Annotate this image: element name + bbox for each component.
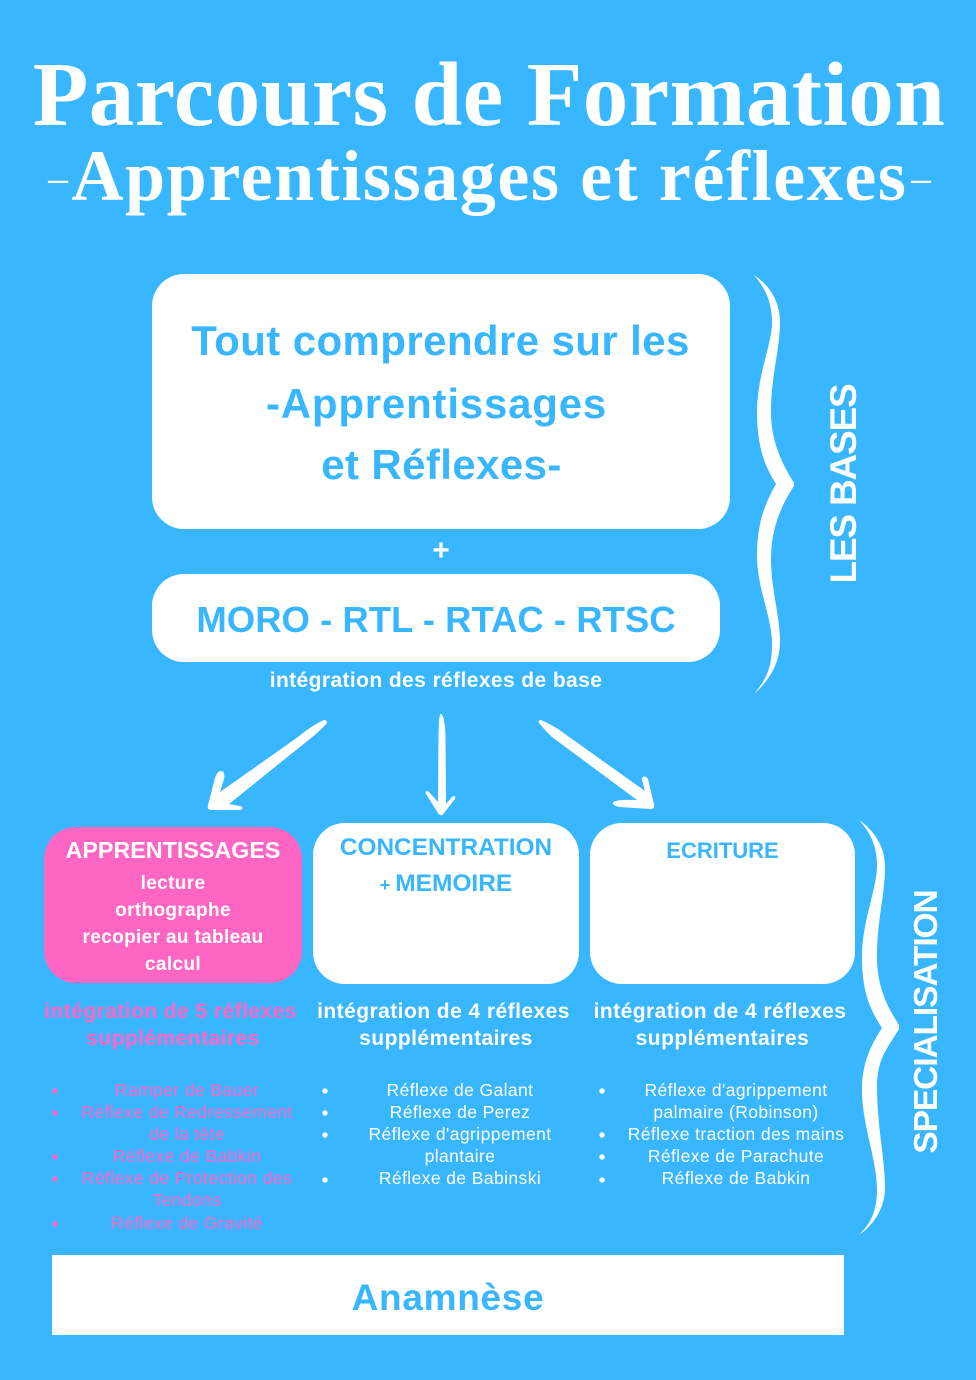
panel: ecriture: ECRITURE bbox=[666, 838, 779, 863]
brace: les bases bbox=[754, 275, 794, 694]
panel: tout comprendre: -Apprentissages bbox=[266, 380, 607, 427]
heading: concentration réflexes: supplémentaires bbox=[359, 1027, 533, 1050]
caption: intégration des réflexes de base: intégration des réflexes de base bbox=[270, 669, 602, 692]
heading: apprentissages réflexes: intégration de 5 réflexes bbox=[44, 1000, 297, 1023]
bullets: list markers bbox=[52, 1088, 605, 1227]
panel: apprentissages: orthographe bbox=[115, 900, 231, 921]
list: concentration: plantaire bbox=[425, 1146, 495, 1166]
title: Parcours de Formation bbox=[33, 44, 945, 145]
heading: concentration réflexes bbox=[317, 1000, 570, 1050]
list: apprentissages: Réflexe de Redressement bbox=[81, 1102, 293, 1122]
label: specialisation: SPECIALISATION bbox=[908, 890, 945, 1154]
heading: concentration réflexes: intégration de 4 réflexes bbox=[317, 1000, 570, 1023]
plus sign: + bbox=[432, 534, 450, 567]
arrow: right bbox=[538, 720, 654, 809]
list: concentration: Réflexe de Perez bbox=[390, 1102, 530, 1122]
list: concentration bbox=[369, 1080, 551, 1188]
heading: apprentissages réflexes: supplémentaires bbox=[86, 1027, 260, 1050]
list: apprentissages: Réflexe de Gravité bbox=[111, 1213, 263, 1233]
heading: ecriture réflexes: intégration de 4 réflexes bbox=[594, 1000, 846, 1023]
heading: ecriture réflexes: supplémentaires bbox=[636, 1027, 809, 1050]
list: ecriture: Réflexe d'agrippement bbox=[645, 1080, 827, 1100]
title: - bbox=[908, 163, 934, 196]
panel: apprentissages: calcul bbox=[145, 954, 201, 975]
arrow: left bbox=[208, 720, 327, 810]
list: apprentissages: Tendons bbox=[153, 1190, 221, 1210]
list: concentration: Réflexe de Babinski bbox=[379, 1168, 541, 1188]
list: ecriture: Réflexe de Parachute bbox=[648, 1146, 824, 1166]
heading: apprentissages réflexes bbox=[44, 1000, 297, 1050]
title: Apprentissages et réflexes bbox=[71, 136, 908, 216]
title: - bbox=[45, 163, 71, 196]
panel: tout comprendre: et Réflexes- bbox=[321, 441, 562, 488]
list: ecriture bbox=[628, 1080, 844, 1188]
panel: anamnèse: Anamnèse bbox=[352, 1277, 544, 1318]
panel: apprentissages: APPRENTISSAGES bbox=[66, 837, 280, 863]
panel: apprentissages: recopier au tableau bbox=[83, 927, 263, 948]
list: apprentissages: Ramper de Bauer bbox=[115, 1080, 259, 1100]
panel: apprentissages: lecture bbox=[141, 873, 205, 894]
list: apprentissages: de la tête bbox=[149, 1124, 225, 1144]
heading: ecriture réflexes bbox=[594, 1000, 846, 1050]
list: apprentissages bbox=[81, 1080, 293, 1233]
panel: réflexes de base bbox=[152, 574, 720, 662]
panel: tout comprendre bbox=[152, 274, 730, 529]
panel: apprentissages bbox=[44, 827, 302, 983]
panel: concentration bbox=[313, 823, 579, 984]
list: ecriture: Réflexe de Babkin bbox=[662, 1168, 810, 1188]
list: apprentissages: Réflexe de Protection des bbox=[82, 1168, 292, 1188]
list: ecriture: palmaire (Robinson) bbox=[653, 1102, 819, 1122]
panel: ecriture bbox=[590, 823, 855, 984]
title bbox=[33, 44, 945, 216]
list: concentration: Réflexe d'agrippement bbox=[369, 1124, 551, 1144]
brace: specialisation bbox=[859, 820, 899, 1235]
panel: réflexes de base: MORO - RTL - RTAC - RTSC bbox=[196, 599, 676, 640]
label: les bases: LES BASES bbox=[823, 385, 864, 583]
arrow: centre bbox=[426, 714, 456, 816]
panel: concentration: CONCENTRATION bbox=[340, 834, 552, 861]
panel: tout comprendre: Tout comprendre sur les bbox=[191, 317, 690, 364]
list: apprentissages: Réflexe de Babkin bbox=[113, 1146, 261, 1166]
panel: concentration: + MEMOIRE bbox=[380, 870, 512, 897]
panel: anamnèse bbox=[52, 1255, 844, 1335]
list: concentration: Réflexe de Galant bbox=[387, 1080, 533, 1100]
list: ecriture: Réflexe traction des mains bbox=[628, 1124, 844, 1144]
